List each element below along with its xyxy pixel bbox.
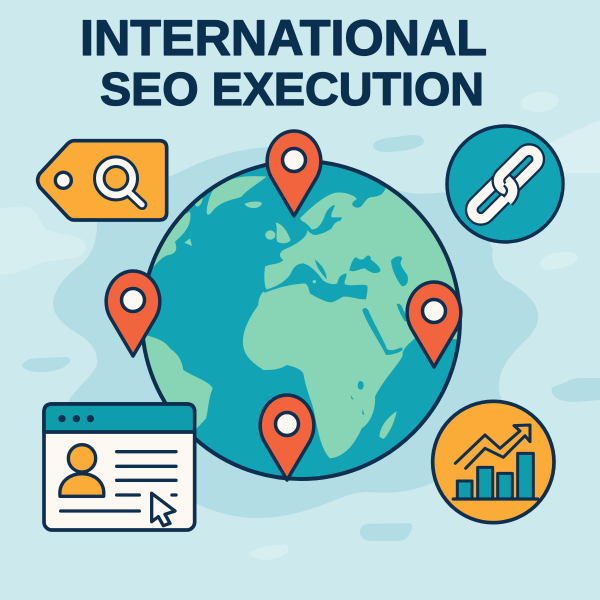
globe (140, 161, 467, 479)
window dots (58, 415, 94, 422)
title line 1: INTERNATIONAL (80, 10, 487, 66)
location pin: top (267, 131, 321, 216)
window header bar (44, 404, 195, 432)
title (80, 10, 487, 115)
magnifier (99, 162, 142, 205)
icon: growth chart badge (433, 401, 554, 523)
baseline (453, 494, 538, 504)
user avatar (60, 445, 104, 496)
icon: price tag with magnifier (38, 141, 167, 220)
browser window (44, 404, 195, 530)
tag hole (55, 172, 71, 188)
location pin: bottom (260, 395, 314, 480)
cursor (152, 493, 175, 526)
seas (262, 205, 409, 355)
title line 2: SEO EXECUTION (100, 63, 484, 115)
bars (457, 453, 533, 499)
text lines (61, 452, 176, 511)
location pin: left (106, 271, 160, 356)
chain links (468, 146, 542, 223)
location pin: right (407, 282, 461, 367)
landmasses (140, 176, 467, 458)
icon: chain link badge (447, 126, 563, 242)
trend arrow (455, 425, 530, 468)
